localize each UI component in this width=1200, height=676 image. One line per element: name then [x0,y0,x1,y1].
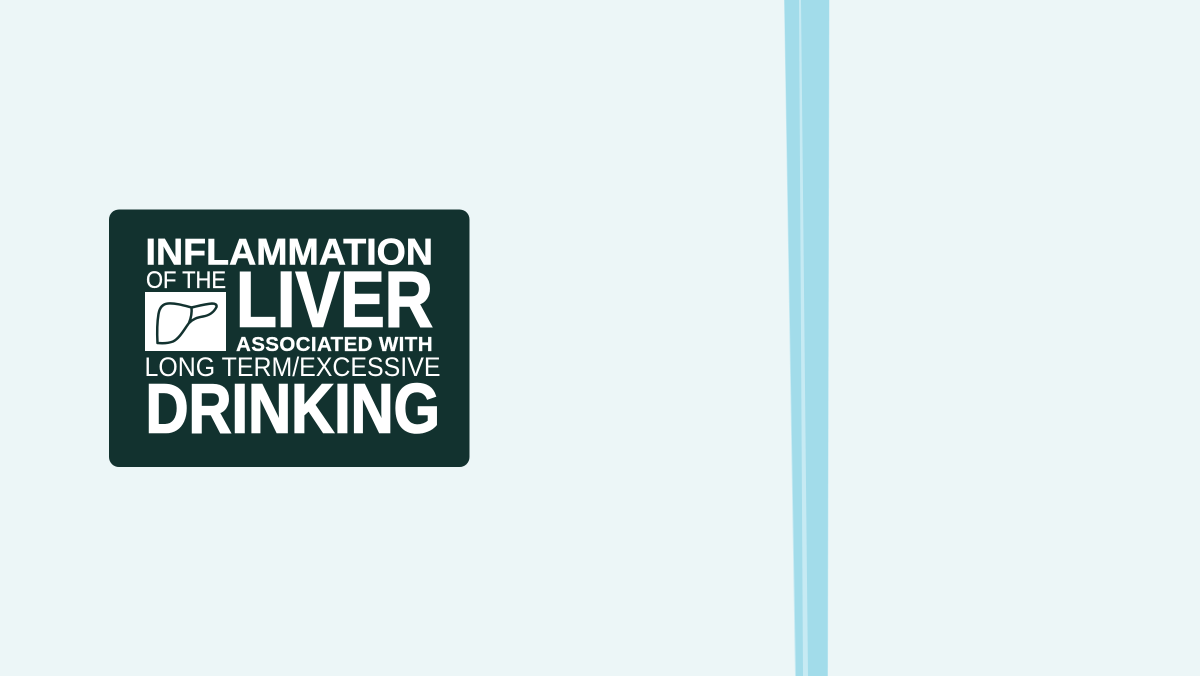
panel: definition card [109,210,470,467]
heading: drinking: DRINKING [146,370,440,448]
icon: liver [145,292,226,351]
heading: inflammation: INFLAMMATION [146,230,433,272]
text: of the: OF THE [146,267,226,294]
text: associated with: ASSOCIATED WITH [236,333,432,356]
heading: liver: LIVER [236,254,433,344]
light blue vertical stripe [784,0,830,676]
text: long term/excessive: LONG TERM/EXCESSIVE [144,352,440,382]
